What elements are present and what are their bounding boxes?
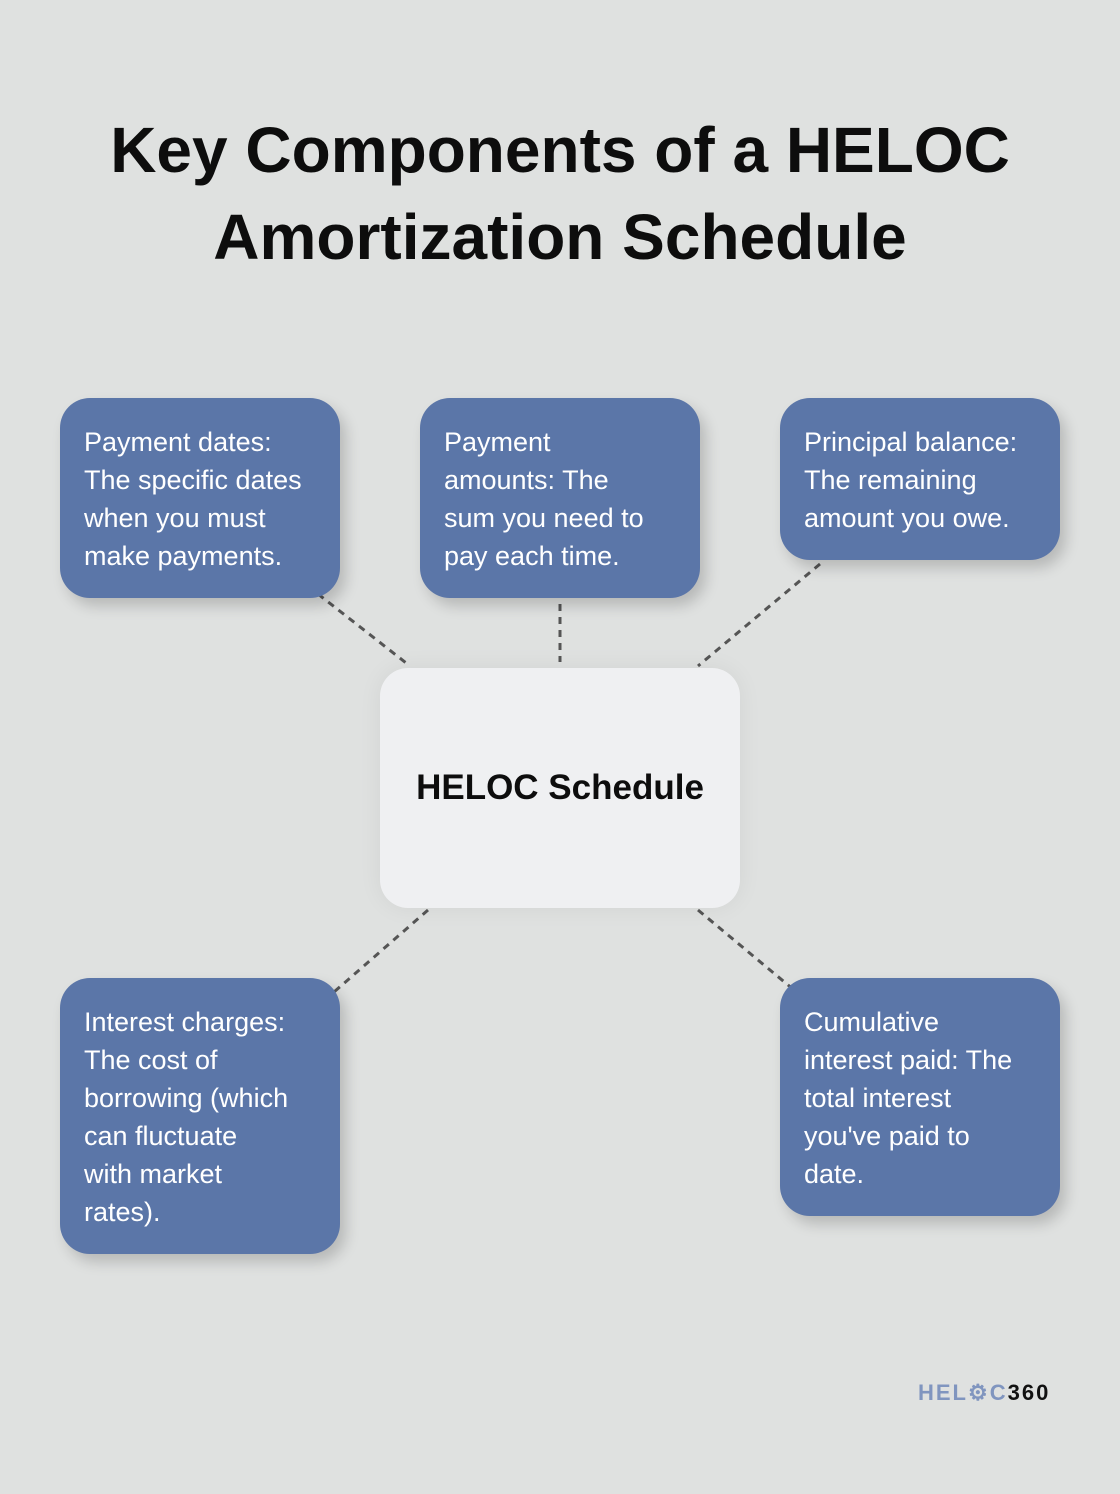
box: principal balance: Principal balance:	[804, 427, 1017, 457]
box: cumulative interest: Cumulative	[804, 1007, 939, 1037]
box: payment dates: when you must	[84, 503, 266, 533]
box: payment amounts: Payment	[444, 427, 551, 457]
box: interest charges	[60, 978, 340, 1254]
box: interest charges: Interest charges:	[84, 1007, 285, 1037]
box: payment amounts: amounts: The	[444, 465, 609, 495]
box: cumulative interest: interest paid: The	[804, 1045, 1012, 1075]
box: interest charges: rates).	[84, 1197, 161, 1227]
box: payment amounts: pay each time.	[444, 541, 620, 571]
box: cumulative interest: you've paid to	[804, 1121, 970, 1151]
box: payment dates	[60, 398, 340, 598]
box: payment dates: The specific dates	[84, 465, 302, 495]
box: principal balance: amount you owe.	[804, 503, 1010, 533]
box: payment dates: Payment dates:	[84, 427, 272, 457]
box: cumulative interest: date.	[804, 1159, 864, 1189]
box: principal balance: The remaining	[804, 465, 977, 495]
box: interest charges: borrowing (which	[84, 1083, 288, 1113]
center: HELOC schedule: HELOC Schedule	[416, 768, 704, 807]
box: cumulative interest: total interest	[804, 1083, 951, 1113]
title	[110, 114, 1010, 273]
box: interest charges: can fluctuate	[84, 1121, 237, 1151]
box: interest charges: The cost of	[84, 1045, 218, 1075]
center: HELOC schedule	[380, 668, 740, 908]
box: payment amounts: sum you need to	[444, 503, 644, 533]
box: payment dates: make payments.	[84, 541, 282, 571]
logo: HEL⚙C360	[918, 1380, 1050, 1405]
box: cumulative interest	[780, 978, 1060, 1216]
box: principal balance	[780, 398, 1060, 560]
box: payment amounts	[420, 398, 700, 598]
box: interest charges: with market	[84, 1159, 222, 1189]
title: Key Components of a HELOC	[110, 114, 1010, 186]
title: Amortization Schedule	[213, 201, 907, 273]
